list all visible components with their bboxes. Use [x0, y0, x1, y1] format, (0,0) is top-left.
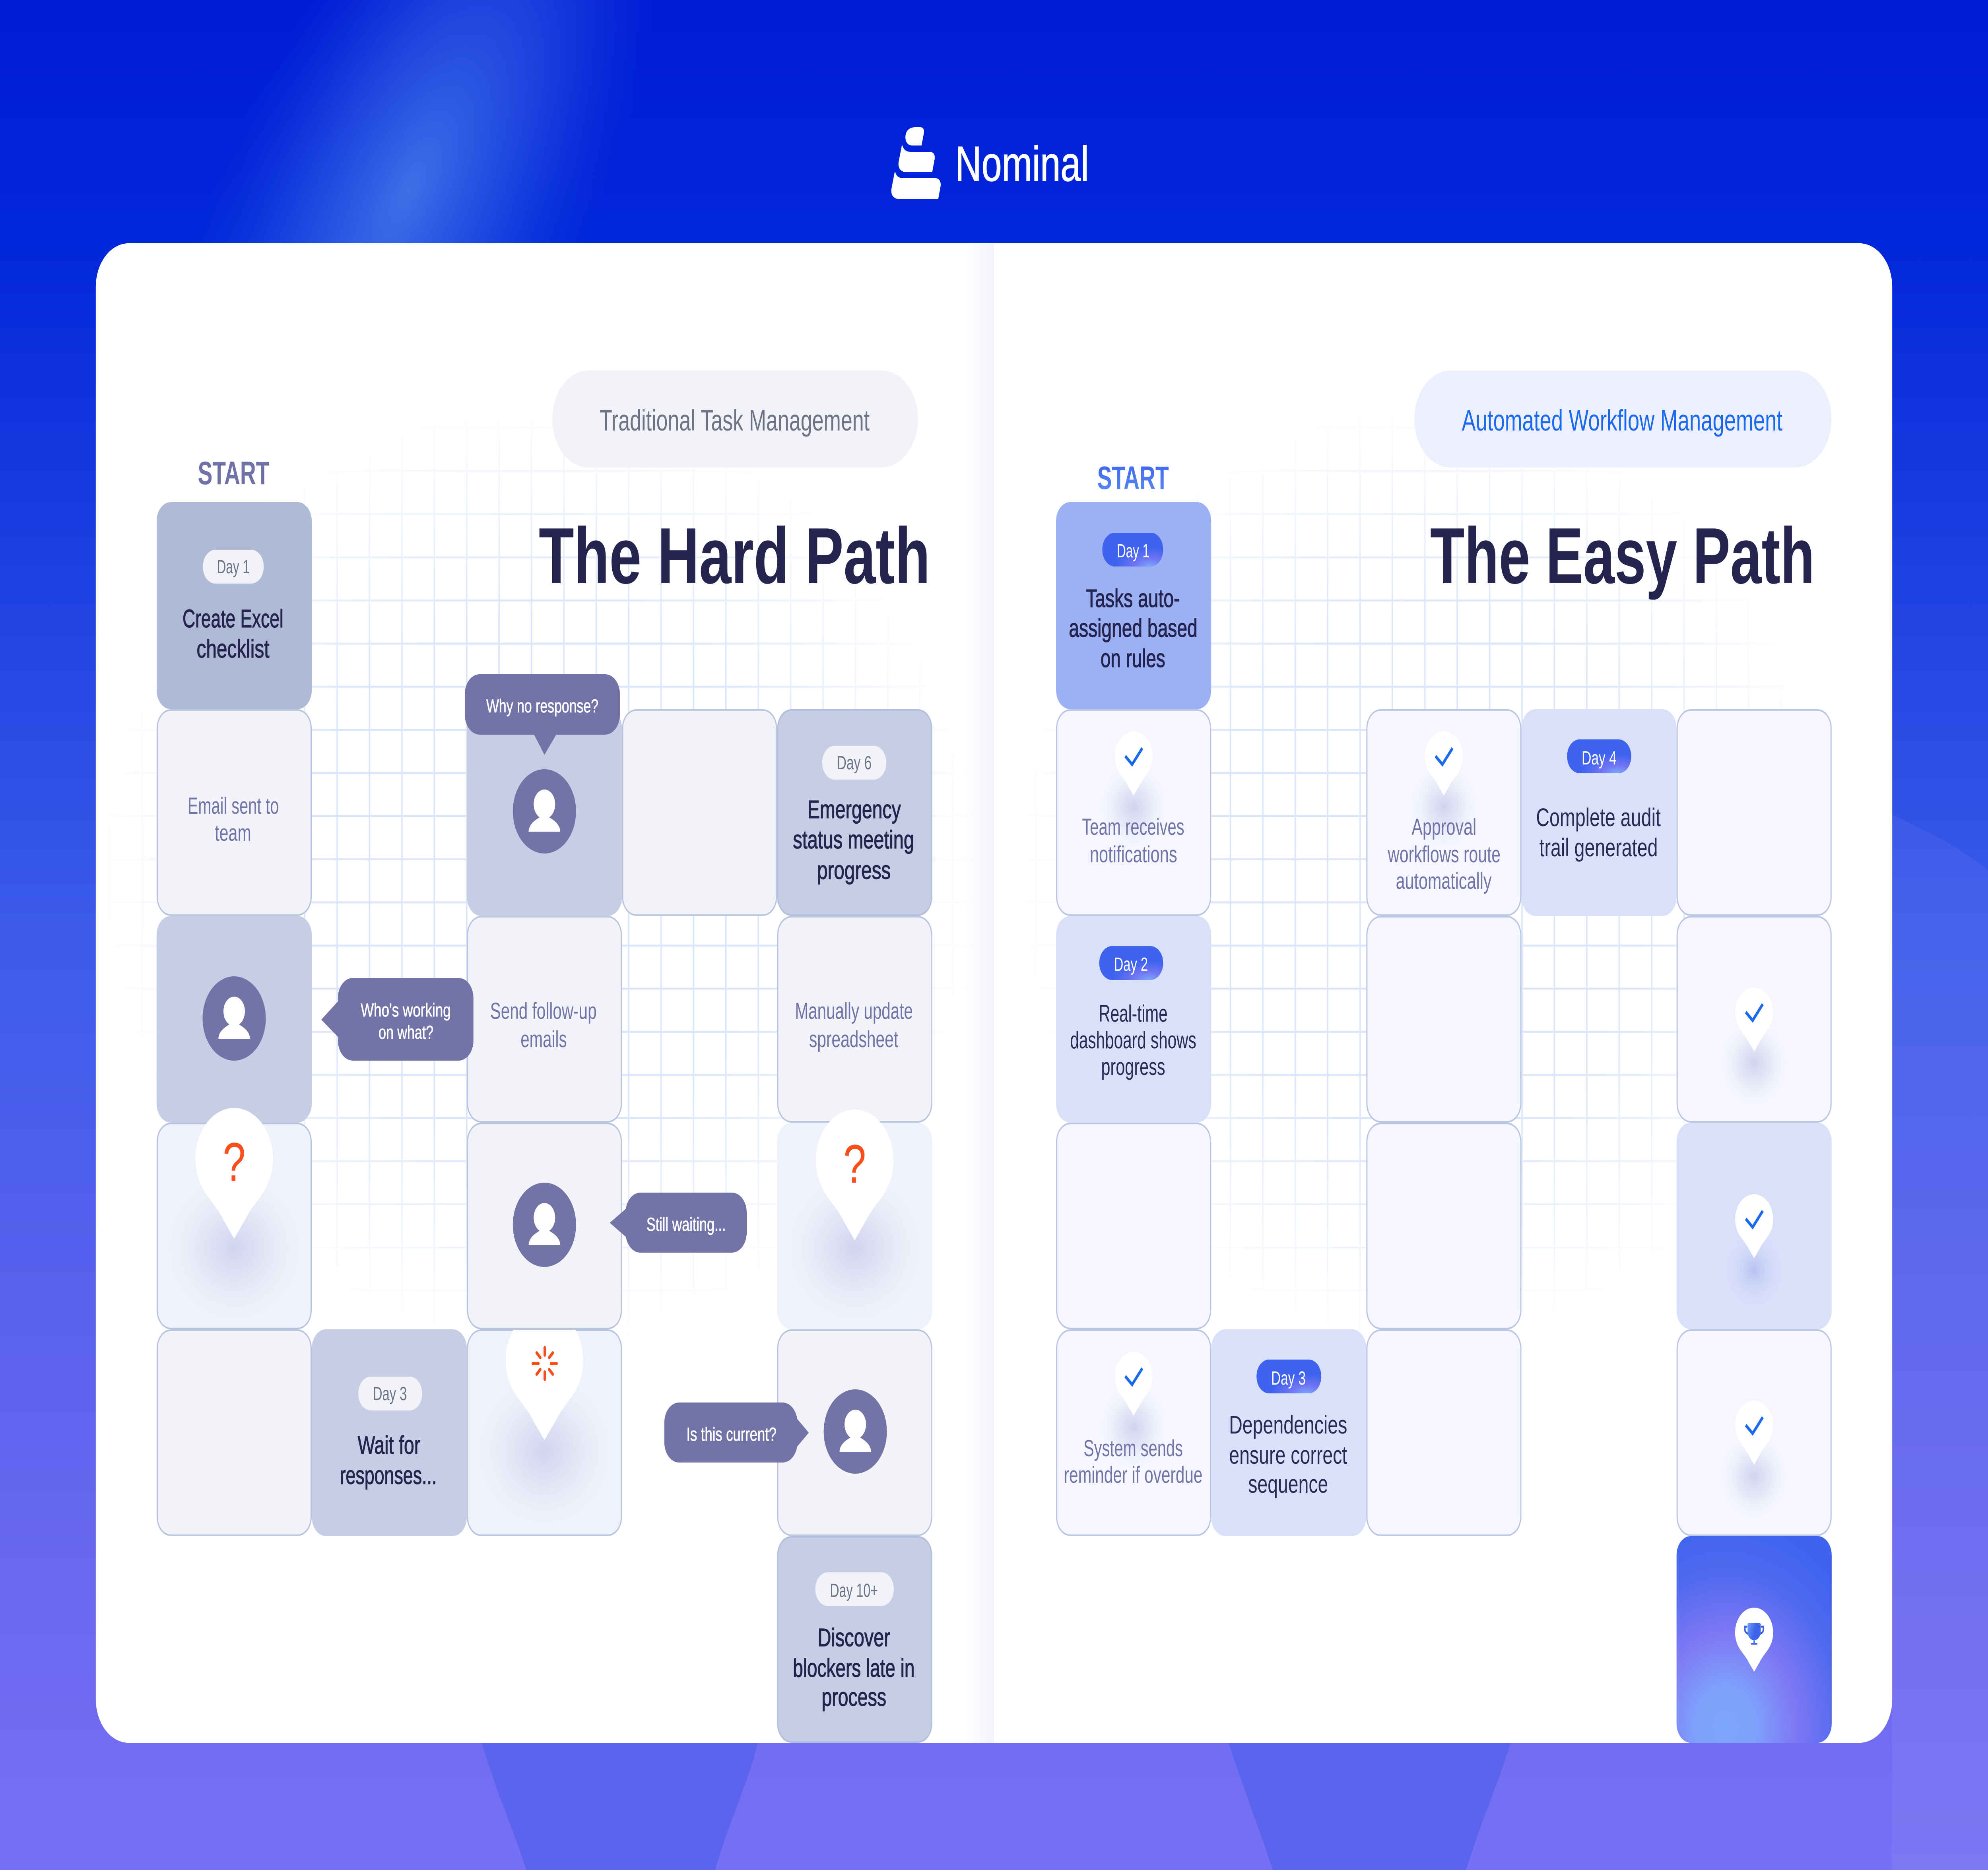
cell: System sends reminder: reminder if overdue	[1064, 1462, 1202, 1488]
cell: question pin left	[157, 1108, 311, 1329]
text: process	[821, 1683, 886, 1711]
title: The Hard Path	[539, 512, 930, 600]
text: sequence	[1248, 1470, 1328, 1498]
text: checklist	[196, 634, 270, 663]
cell: Day 1 Tasks auto-assigned	[1056, 502, 1211, 709]
badge	[815, 1572, 894, 1606]
callout: Who's working on what?	[321, 978, 474, 1061]
main white card	[96, 243, 1892, 1743]
cell: question pin right	[777, 1110, 932, 1329]
cell: Day 4 Complete audit	[1522, 709, 1677, 916]
callout: Still waiting...	[610, 1193, 747, 1253]
label pill: Traditional Task Management	[552, 371, 918, 468]
badge	[1099, 946, 1163, 980]
cell: Day 1 Create Excel checklist	[157, 502, 312, 709]
text	[182, 604, 283, 663]
badge: Day 1	[217, 556, 250, 577]
cell: Day 3 Dependencies	[1211, 1329, 1366, 1536]
cell: empty row 5 col 3	[1367, 1330, 1521, 1535]
label pill: Automated Workflow Management: Automated Workflow Management	[1462, 404, 1782, 437]
badge: Day 3	[373, 1383, 407, 1404]
badge: Day 4	[1582, 747, 1617, 768]
text	[340, 1431, 437, 1490]
text	[1070, 1001, 1196, 1080]
cell: Approval workflows: Approval	[1411, 814, 1476, 840]
cell: System sends reminder	[1057, 1330, 1211, 1535]
icon: trophy	[1745, 1623, 1763, 1645]
callout: Who's working on what?: Who's working	[361, 999, 451, 1020]
callout: Why no response?: Why no response?	[486, 695, 598, 716]
text: responses...	[340, 1461, 437, 1490]
cell: Approval workflows	[1367, 710, 1521, 915]
background grid: left	[144, 448, 934, 1293]
cell: Day 2 Real-time dashboard	[1056, 916, 1211, 1123]
text: dashboard shows	[1070, 1027, 1196, 1054]
start label: START	[198, 455, 270, 491]
cell: check row 5 col 5	[1677, 1330, 1831, 1535]
badge: Day 10+	[830, 1580, 878, 1601]
callout: Why no response?	[465, 674, 620, 755]
text	[793, 795, 914, 885]
cell: Manually update spreadsheet: Manually update	[795, 998, 913, 1024]
logo: Nominal	[891, 127, 1089, 199]
text: ensure correct	[1229, 1441, 1347, 1469]
cell: System sends reminder: System sends	[1083, 1435, 1183, 1461]
cell: Manually update spreadsheet	[778, 917, 932, 1122]
cell: Send follow-up emails	[468, 917, 621, 1122]
text: Real-time	[1099, 1001, 1168, 1027]
badge: Day 6	[837, 752, 872, 773]
badge	[203, 550, 264, 584]
text: Dependencies	[1229, 1410, 1347, 1439]
callout: Still waiting...: Still waiting...	[646, 1214, 726, 1235]
text: trail generated	[1540, 833, 1658, 862]
text: progress	[1101, 1054, 1165, 1080]
cell: empty row 4 col 1	[1057, 1123, 1211, 1329]
icon: spinner	[533, 1348, 557, 1379]
text: Tasks auto-	[1086, 584, 1180, 613]
cell: question pin left: ?	[223, 1131, 246, 1192]
text: assigned based	[1069, 614, 1198, 642]
cell: empty row 5 col 1	[157, 1330, 311, 1535]
cell: Team receives notifications: Team receives	[1082, 814, 1184, 840]
cell: finish with trophy	[1677, 1536, 1832, 1743]
cell: Team receives notifications	[1057, 710, 1211, 915]
text	[1069, 584, 1198, 673]
text	[793, 1623, 914, 1711]
logo: Nominal: Nominal	[955, 137, 1089, 192]
badge	[1567, 739, 1631, 773]
cell: avatar with Is this current	[778, 1330, 932, 1535]
cell: Email sent to team	[157, 710, 311, 915]
callout: Is this current?	[664, 1402, 809, 1463]
badge: Day 3	[1271, 1368, 1306, 1389]
cell: Approval workflows: automatically	[1396, 868, 1492, 894]
text: blockers late in	[793, 1654, 914, 1682]
cell: Day 6 Emergency status meeting	[778, 710, 932, 915]
text: status meeting	[793, 825, 914, 854]
cell: Email sent to team: team	[215, 820, 251, 846]
start label: START	[1097, 460, 1169, 496]
cell: Manually update spreadsheet: spreadsheet	[809, 1026, 898, 1052]
label pill: Automated Workflow Management	[1414, 371, 1831, 468]
callout: Who's working on what?: on what?	[379, 1022, 433, 1043]
text: Discover	[818, 1623, 890, 1652]
text: Emergency	[808, 795, 901, 824]
cell: check row 3 col 5	[1677, 917, 1831, 1122]
badge: Day 1	[1117, 540, 1149, 561]
callout: Is this current?: Is this current?	[686, 1424, 777, 1445]
cell: Team receives notifications: notifications	[1090, 842, 1177, 867]
cell: Email sent to team: Email sent to	[188, 793, 279, 819]
cell: Send follow-up emails: Send follow-up	[490, 998, 597, 1024]
text: progress	[817, 856, 891, 885]
background grid: right	[1068, 451, 1756, 1294]
text: Wait for	[358, 1431, 420, 1459]
text	[1536, 803, 1661, 862]
centre divider shading	[963, 243, 994, 1743]
title: The Easy Path	[1430, 512, 1815, 600]
cell: question pin right: ?	[843, 1133, 866, 1194]
cell: check row 4 col 5	[1677, 1123, 1832, 1329]
cell: Approval workflows: workflows route	[1388, 842, 1501, 867]
text	[1229, 1410, 1347, 1498]
cell: avatar with Still waiting	[468, 1123, 621, 1329]
cell: spinner pin	[468, 1309, 621, 1535]
label pill: Traditional Task Management: Traditional Task Management	[600, 404, 870, 437]
badge	[1102, 533, 1163, 566]
cell: empty row 4 col 3	[1367, 1123, 1521, 1329]
cell: Send follow-up emails: emails	[520, 1026, 567, 1052]
cell: avatar with Why no response	[467, 709, 622, 916]
text: on rules	[1101, 644, 1165, 673]
panel: The Easy Path	[1056, 371, 1832, 1743]
cell: empty row 2 col 4	[623, 710, 777, 915]
cell: Day 10+ Discover blockers	[778, 1537, 932, 1742]
badge: Day 2	[1114, 954, 1148, 975]
cell: Day 3 Wait for responses	[312, 1329, 467, 1536]
badge	[1256, 1360, 1321, 1393]
panel: The Hard Path	[157, 371, 932, 1742]
cell: empty row 2 col 5	[1677, 710, 1831, 915]
badge	[358, 1377, 422, 1410]
cell: empty row 3 col 3	[1367, 917, 1521, 1122]
text: Create Excel	[182, 604, 283, 633]
text: Complete audit	[1536, 803, 1661, 832]
cell: avatar row 3	[157, 916, 312, 1123]
badge	[822, 746, 886, 780]
